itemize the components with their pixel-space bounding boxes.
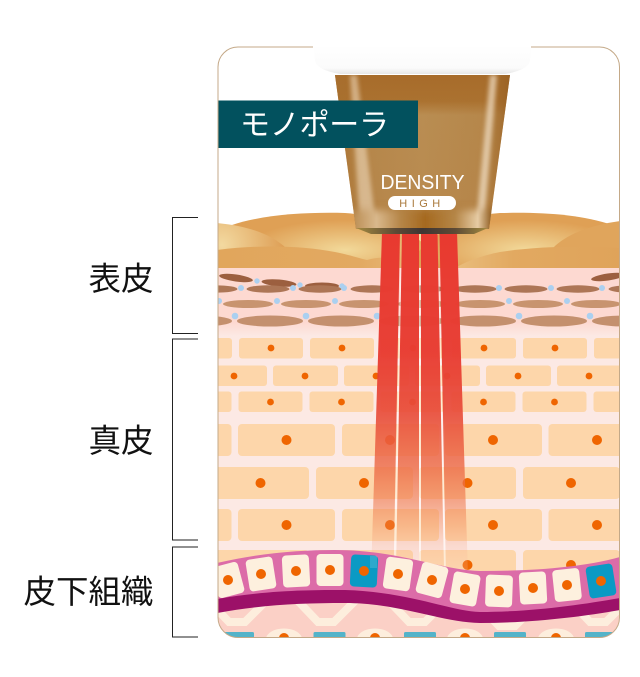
skin surface mounds xyxy=(217,213,620,270)
dermis background xyxy=(218,336,619,570)
dermis cell nuclei xyxy=(231,345,602,570)
label: 皮下組織: 皮下組織 xyxy=(23,574,154,610)
banner: モノポーラ xyxy=(217,100,418,148)
subcutaneous tissue background xyxy=(218,603,619,637)
bracket: 皮下組織 xyxy=(172,547,198,637)
label: 表皮: 表皮 xyxy=(88,261,154,297)
banner: モノポーラ: モノポーラ xyxy=(240,109,389,142)
energy beams xyxy=(371,232,468,575)
HIGH pill xyxy=(388,196,456,210)
label: 真皮: 真皮 xyxy=(88,423,154,459)
epidermis background xyxy=(217,268,620,336)
dermis brick cells xyxy=(218,338,619,571)
card outline xyxy=(218,47,620,638)
bracket: 表皮 xyxy=(172,218,198,334)
panel: skin cross-section card xyxy=(218,46,620,638)
probe body xyxy=(330,75,515,240)
bracket: 真皮 xyxy=(172,339,198,540)
basal cells row xyxy=(211,554,617,607)
HIGH pill: HIGH xyxy=(399,198,445,210)
DENSITY label: DENSITY xyxy=(380,172,464,194)
purple basement membrane xyxy=(217,590,620,623)
epidermis cells xyxy=(218,272,619,326)
pink basal band xyxy=(217,550,620,618)
probe cap xyxy=(324,69,520,74)
